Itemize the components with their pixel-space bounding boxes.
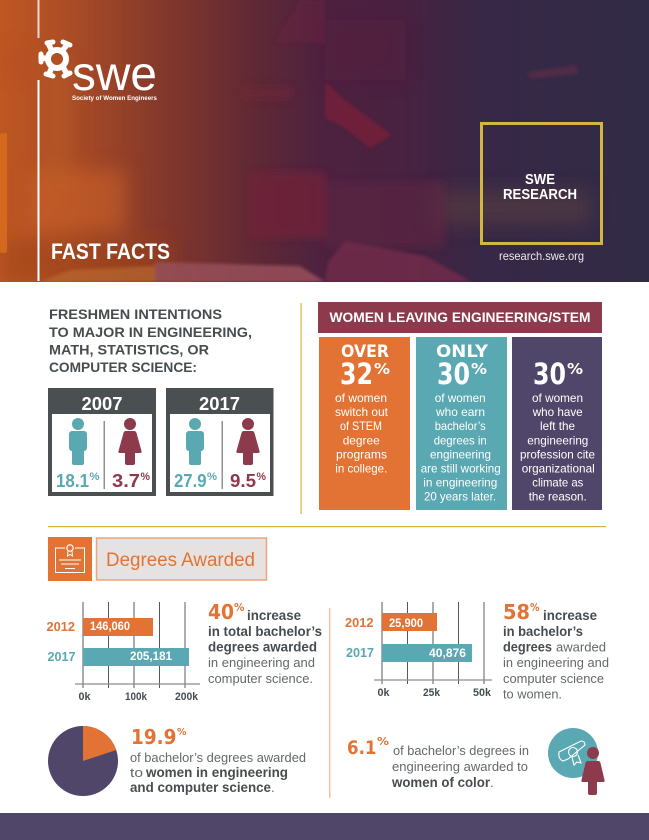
- stat: 58 percent increase: 58: [503, 600, 530, 624]
- axis labels: 100k: [125, 691, 148, 703]
- card text: in college.: [335, 462, 387, 476]
- bar: 2017: 2017: [48, 649, 76, 664]
- stat: 58 percent increase: to women.: [503, 686, 562, 702]
- icon: diploma and woman: [548, 728, 605, 795]
- bar chart: total degrees: [46, 602, 200, 703]
- title: fast facts: FAST FACTS: [51, 239, 170, 264]
- bar: 2012: [46, 618, 153, 636]
- logo tagline: Society of Women Engineers: [72, 95, 157, 102]
- panel: 2007: [48, 388, 156, 496]
- axis labels: 25k: [423, 687, 441, 699]
- bar: 2012: 25,900: [389, 616, 423, 630]
- panel: 2017: [166, 388, 274, 496]
- card text: engineering: [430, 448, 491, 462]
- card text: climate as: [532, 476, 583, 490]
- stat: 19.9 percent: and computer science: [130, 780, 271, 795]
- stat: 6.1 percent: women of color: [391, 775, 491, 790]
- stat: 30 percent: %: [567, 360, 583, 378]
- stat: 30 percent: 30: [437, 357, 470, 391]
- card text: engineering: [527, 434, 588, 448]
- panel: 2007: 2007: [82, 393, 122, 414]
- icon: male figure: [186, 418, 204, 465]
- stat: women 2017: %: [256, 471, 266, 483]
- bar: 2012: [345, 613, 437, 631]
- card text: are still working: [421, 462, 501, 476]
- panel: 30 percent left: [512, 337, 602, 510]
- card text: left the: [540, 419, 575, 433]
- card text: who have: [532, 405, 583, 419]
- stat: 40 percent increase: [208, 600, 322, 686]
- heading: degrees awarded: Degrees Awarded: [106, 550, 255, 571]
- heading: degrees awarded: [96, 538, 266, 580]
- bar: 2017: 2017: [346, 645, 374, 660]
- stat: 19.9 percent: to: [130, 765, 143, 780]
- heading: women leaving engineering: [318, 302, 602, 333]
- icon: female figure: [118, 418, 142, 465]
- stat: 30 percent: ONLY: [436, 342, 489, 361]
- axis labels: [78, 691, 199, 703]
- card text: 20 years later.: [424, 490, 496, 504]
- card text: of women: [335, 391, 387, 405]
- stat: 32 percent: 32: [340, 357, 373, 391]
- laptop edge: [0, 133, 7, 253]
- logo gear mark: [41, 42, 70, 76]
- stat: men 2007: 18.1: [56, 470, 89, 491]
- bar: 2012: 2012: [46, 619, 75, 634]
- axis labels: 0k: [78, 691, 91, 703]
- stat: 40 percent increase: %: [234, 601, 244, 614]
- stat: men 2007: %: [90, 471, 100, 483]
- bar: 2012: 2012: [345, 615, 374, 630]
- stat: 40 percent increase: in total bachelor’s: [208, 624, 322, 639]
- heading: freshmen intentions: TO MAJOR IN ENGINEERING,: [49, 324, 252, 340]
- bar: 2017: 205,181: [130, 649, 172, 663]
- axis labels: 0k: [378, 687, 390, 699]
- stat: 19.9 percent: women in engineering: [145, 765, 288, 780]
- heading: freshmen intentions: COMPUTER SCIENCE:: [49, 359, 197, 375]
- pie chart: 19.9 percent: [48, 726, 118, 796]
- stat: 58 percent increase: awarded: [556, 640, 606, 654]
- card text: bachelor’s: [435, 419, 486, 433]
- stat: 6.1 percent: .: [490, 775, 494, 790]
- stat: women 2007: %: [140, 471, 150, 483]
- heading: freshmen intentions: [49, 306, 252, 375]
- icon: male figure: [69, 418, 87, 465]
- stat: men 2017: 27.9: [174, 470, 206, 491]
- card text: in engineering: [423, 476, 497, 490]
- stat: 19.9 percent: .: [271, 780, 275, 795]
- card text: who earn: [435, 405, 485, 419]
- bar: 2017: [48, 648, 189, 666]
- stat: 58 percent increase: in bachelor’s: [503, 624, 583, 639]
- stat: 6.1 percent: engineering awarded to: [392, 759, 528, 774]
- heading: freshmen intentions: MATH, STATISTICS, OR: [49, 342, 209, 358]
- card text: [335, 391, 389, 476]
- stat: 58 percent increase: [503, 600, 609, 702]
- stat: 6.1 percent: [347, 735, 529, 790]
- bar chart: degrees to women: [345, 602, 492, 699]
- icon: certificate: [48, 537, 92, 581]
- axis labels: 50k: [473, 687, 492, 699]
- desk papers: [40, 241, 472, 282]
- logo wordmark: swe: [72, 48, 157, 101]
- stat: 40 percent increase: computer science.: [208, 671, 313, 686]
- stat: 19.9 percent: 19.9: [131, 725, 176, 749]
- SWE research box: SWE: [525, 172, 555, 188]
- card text: the reason.: [529, 490, 587, 504]
- card text: degrees in: [434, 434, 487, 448]
- stat: 40 percent increase: 40: [208, 600, 234, 624]
- stat: 40 percent increase: degrees awarded: [208, 640, 317, 654]
- panel: 2017: 2017: [199, 393, 240, 414]
- bar: 2017: 40,876: [429, 646, 466, 660]
- stat: 30 percent: [436, 342, 489, 391]
- stat: 58 percent increase: %: [530, 601, 540, 614]
- stat: 30 percent: 30: [533, 357, 566, 391]
- stat: 19.9 percent: of bachelor’s degrees awarded: [130, 750, 306, 765]
- bar: 2017: [346, 644, 472, 662]
- stat: 19.9 percent: %: [177, 727, 186, 738]
- stat: 6.1 percent: 6.1: [347, 737, 376, 759]
- stat: 58 percent increase: increase: [543, 608, 597, 623]
- bar: 2012: 146,060: [90, 619, 130, 633]
- stat: 58 percent increase: degrees: [503, 640, 552, 654]
- axis labels: 200k: [175, 691, 199, 703]
- SWE research box: RESEARCH: [503, 187, 577, 203]
- card text: [520, 391, 595, 504]
- card text: switch out: [335, 405, 389, 419]
- diploma: [559, 741, 585, 765]
- SWE logo: [41, 42, 157, 102]
- stat: 58 percent increase: computer science: [503, 671, 604, 686]
- stat: 30 percent: %: [471, 360, 487, 378]
- website url: research.swe.org: [499, 249, 584, 263]
- stat: women 2007: 3.7: [112, 470, 140, 491]
- header photo banner: [0, 0, 649, 282]
- footer band: [0, 813, 649, 840]
- card text: [421, 391, 501, 504]
- stat: 6.1 percent: %: [377, 735, 389, 748]
- icon: female figure: [236, 418, 260, 465]
- stat: women 2017: 9.5: [230, 470, 256, 491]
- card text: profession cite: [520, 448, 595, 462]
- vertical white line: [38, 0, 40, 281]
- stat: 19.9 percent: [130, 725, 306, 795]
- stat: 40 percent increase: increase: [247, 608, 301, 623]
- card text: of women: [435, 391, 486, 405]
- stat: 32 percent: [340, 342, 390, 391]
- card text: degree: [343, 434, 380, 448]
- axis labels: [378, 687, 492, 699]
- card text: of STEM: [340, 419, 382, 433]
- stat: 6.1 percent: of bachelor’s degrees in: [393, 743, 529, 758]
- card text: organizational: [522, 462, 595, 476]
- stat: 32 percent: OVER: [341, 342, 389, 361]
- SWE research box: [482, 124, 602, 244]
- heading: women leaving engineering: WOMEN LEAVING ENGINEERING/STEM: [330, 309, 590, 325]
- panel: over 32 percent: [319, 337, 410, 510]
- woman figure: [581, 747, 605, 795]
- card text: of women: [532, 391, 583, 405]
- stat: women 2007: [112, 470, 150, 491]
- stat: 32 percent: %: [374, 360, 390, 378]
- stat: men 2017: %: [207, 471, 217, 483]
- stat: 58 percent increase: in engineering and: [503, 655, 609, 670]
- panel: only 30 percent: [416, 337, 507, 510]
- heading: freshmen intentions: FRESHMEN INTENTIONS: [49, 306, 222, 322]
- stat: 40 percent increase: in engineering and: [208, 655, 315, 670]
- card text: programs: [336, 448, 387, 462]
